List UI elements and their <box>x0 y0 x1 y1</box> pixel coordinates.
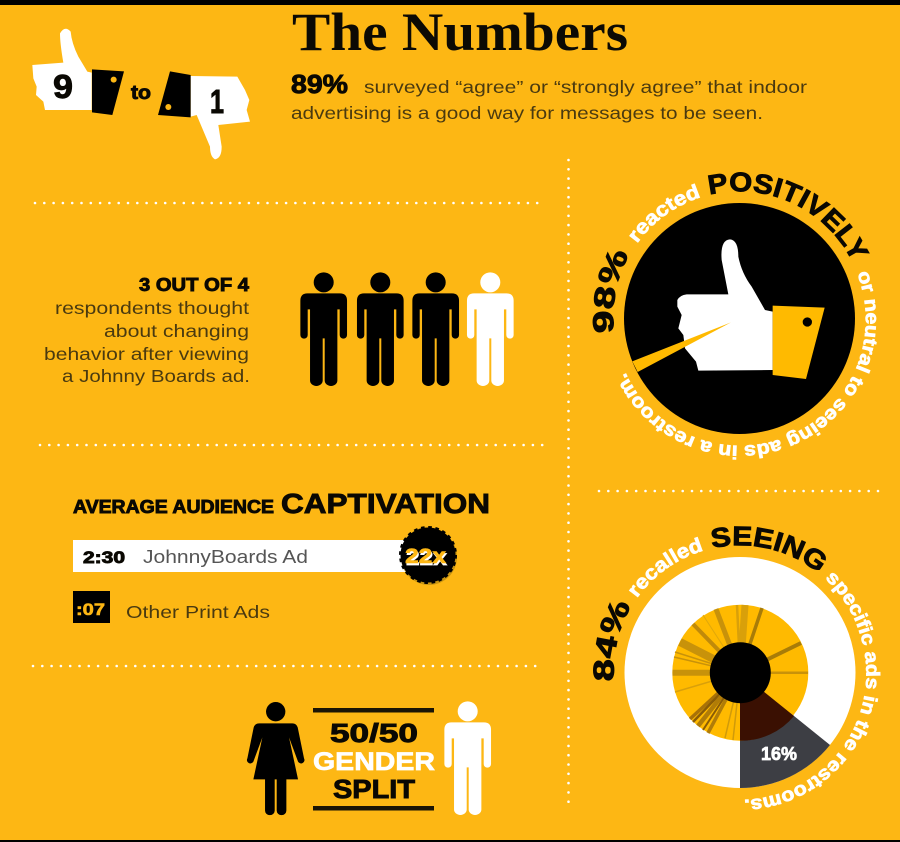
bar: JohnnyBoards <box>73 540 408 572</box>
label other print ads: Other Print Ads <box>126 602 270 622</box>
line 4: a Johnny Boards ad. <box>62 366 250 386</box>
heading large: CAPTIVATION <box>281 488 490 519</box>
text 50/50: 50/50 <box>330 718 418 748</box>
rule bottom <box>313 806 434 810</box>
badge 22x: 22x <box>405 545 446 568</box>
title: The Numbers <box>292 2 628 62</box>
label 16%: 16% <box>761 744 797 764</box>
panel: 98% positively <box>592 172 877 460</box>
curved text 98%: 98% <box>592 251 628 332</box>
text: 89% surveyed <box>291 69 807 123</box>
panel: audience captivation <box>73 488 490 623</box>
value :07: :07 <box>76 600 105 619</box>
text: 3 out of 4 <box>44 275 250 386</box>
curved text POSITIVELY: POSITIVELY <box>708 172 870 257</box>
badge 22x: 22x <box>406 547 447 570</box>
line 3: behavior after viewing <box>44 344 249 364</box>
panel: 84% seeing <box>593 526 881 810</box>
label JohnnyBoards Ad: JohnnyBoards Ad <box>143 547 308 567</box>
text GENDER: GENDER <box>313 748 435 776</box>
donut chart <box>624 557 856 788</box>
line 2: advertising is a good way for messages to be seen. <box>291 103 763 123</box>
panel: gender split <box>247 701 491 815</box>
person 3 <box>412 272 459 386</box>
icon: thumb up <box>32 29 124 115</box>
line 1: respondents thought <box>55 298 249 318</box>
people icons: 3 of 4 <box>300 272 514 386</box>
icon: thumb down <box>158 71 250 159</box>
person 2 <box>357 272 404 386</box>
line 2: about changing <box>104 321 249 341</box>
black circle <box>624 203 855 434</box>
number 1: 1 <box>210 83 224 120</box>
curved text SEEING: SEEING <box>711 526 826 570</box>
heading: 3 OUT OF 4 <box>139 275 249 295</box>
icon: 9 to 1 thumbs <box>32 29 250 159</box>
heading small: AVERAGE AUDIENCE <box>73 497 274 517</box>
word to: to <box>131 83 151 104</box>
stat 89%: 89% <box>291 69 348 99</box>
text SPLIT: SPLIT <box>333 774 415 804</box>
curved text remainder: specific ads in the restrooms. <box>744 572 881 810</box>
number 9: 9 <box>53 68 73 105</box>
person 1 <box>300 272 347 386</box>
icon: large thumb up <box>632 239 825 379</box>
value 2:30: 2:30 <box>83 548 125 567</box>
curved text recalled: recalled <box>628 536 703 598</box>
bar: other print <box>73 591 110 623</box>
icon: man <box>444 701 491 815</box>
rule top <box>313 708 434 712</box>
curved text remainder: or neutral to seeing ads in a restroom. <box>620 272 877 460</box>
curved text 84%: 84% <box>593 602 630 681</box>
person 4 white <box>467 272 514 386</box>
badge 22x <box>400 528 457 585</box>
curved text reacted: reacted <box>629 183 700 243</box>
icon: woman <box>247 702 304 815</box>
line 1: surveyed “agree” or “strongly agree” that indoor <box>364 77 807 97</box>
